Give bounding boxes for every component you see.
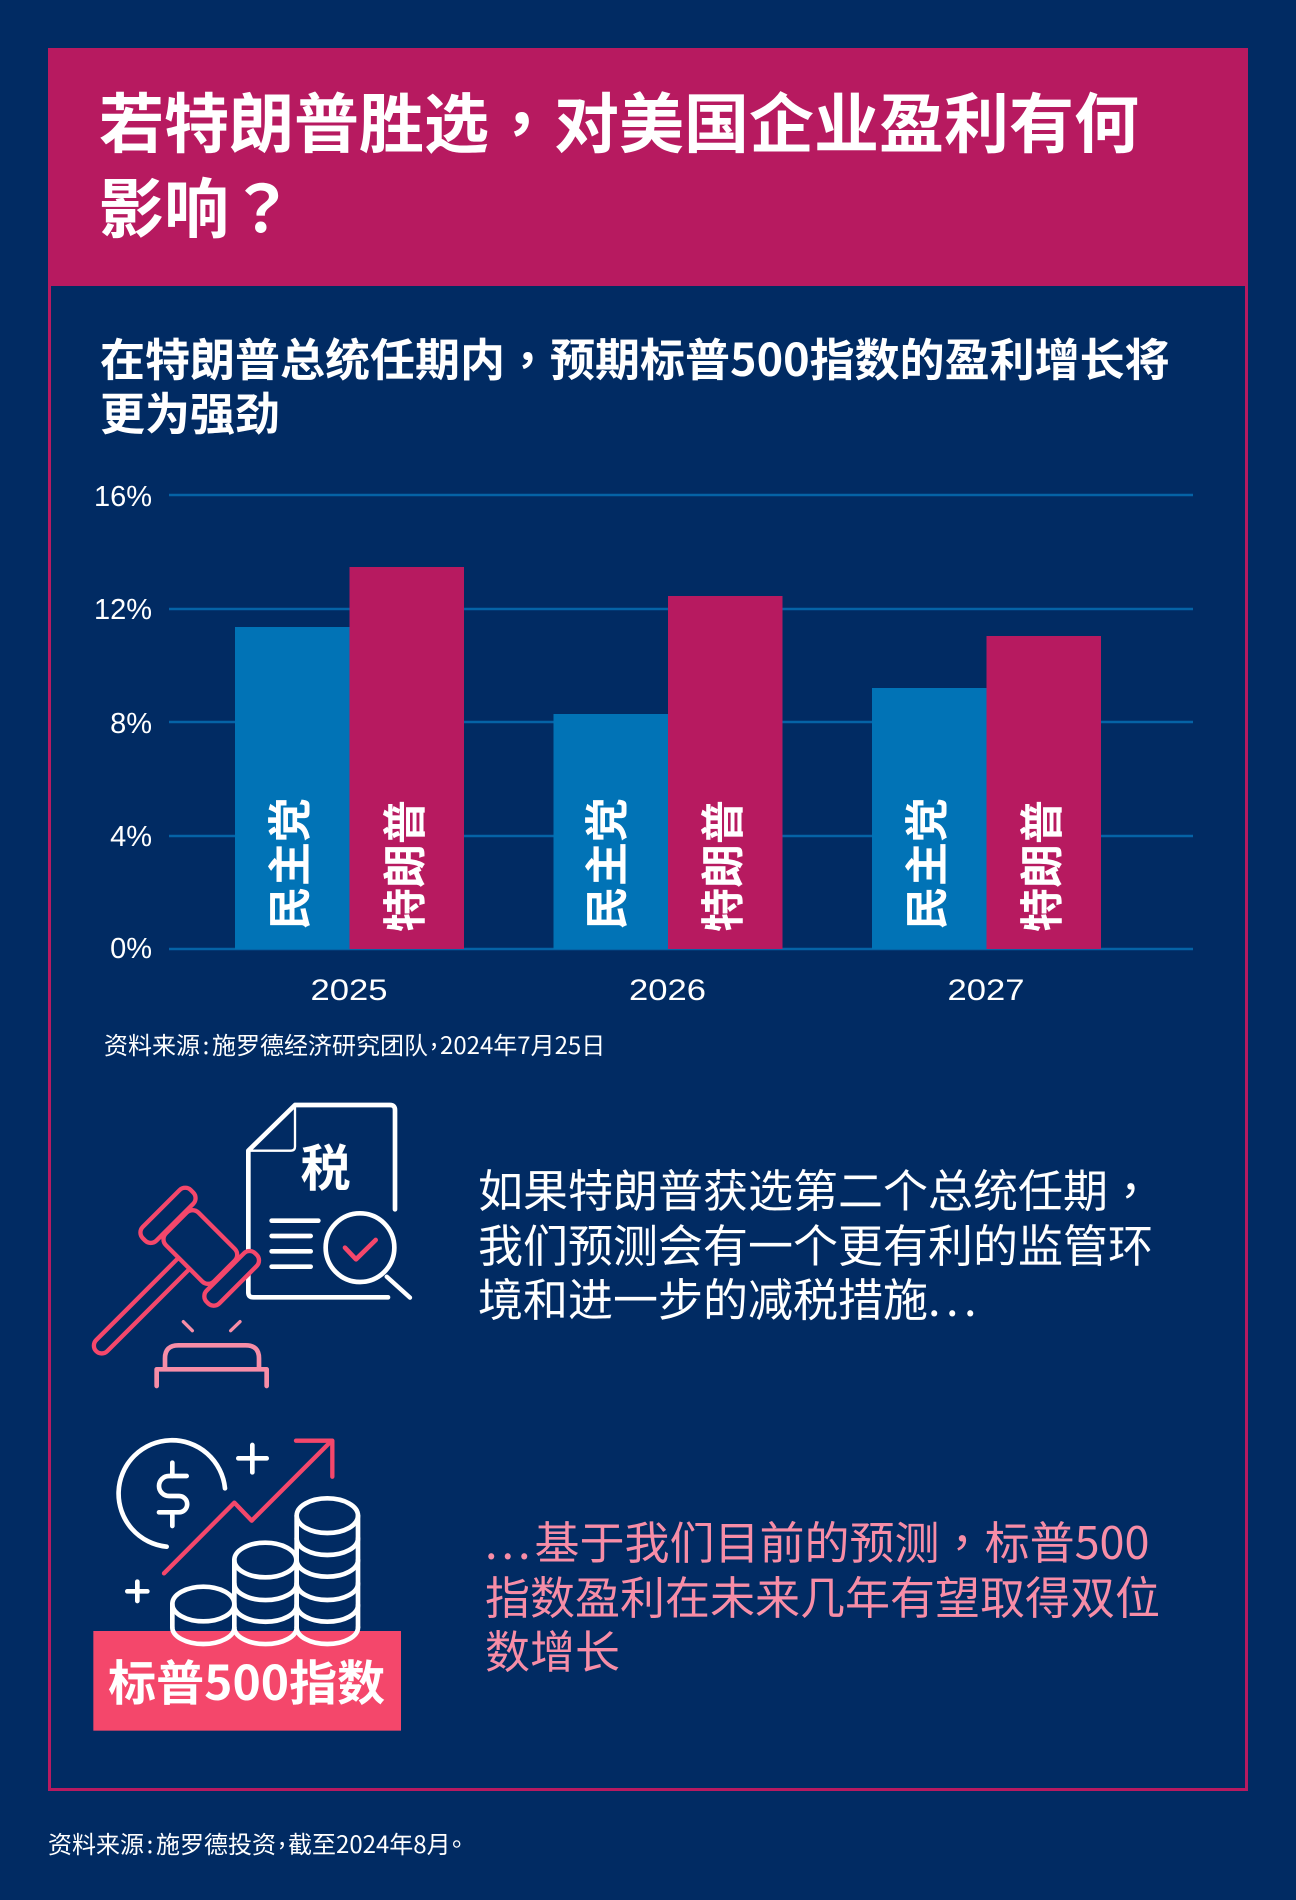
label box: S&amp;P 500 index — [93, 1631, 401, 1731]
icon: gavel and tax document — [92, 1102, 412, 1388]
text block: earnings growth forecast: ...基于我们目前的预测，标普500 — [485, 1507, 1150, 1572]
text block: regulation and tax cuts — [478, 1155, 1153, 1329]
x axis labels: 2025 — [310, 974, 388, 1007]
title: 影响？ — [99, 157, 294, 251]
chart source note: , — [431, 1018, 437, 1053]
bars 2026: 特朗普 — [688, 800, 752, 932]
footer source note: 资料来源 施罗德投资 截至2024年8月。 — [48, 1825, 469, 1860]
bars 2027 — [872, 636, 1101, 949]
y axis labels: 12% — [94, 594, 152, 626]
panel: title banner — [48, 48, 1248, 286]
bars 2026 — [554, 596, 782, 949]
subtitle heading — [100, 324, 1170, 443]
arrow: growth trend — [164, 1441, 332, 1573]
bars 2027: 民主党 — [892, 798, 956, 930]
footer source note: : — [147, 1825, 153, 1860]
label box: S&amp;P 500 index: 标普500指数 — [108, 1644, 385, 1714]
text block: regulation and tax cuts: 如果特朗普获选第二个总统任期， — [478, 1155, 1153, 1220]
footer source note: , — [279, 1817, 285, 1852]
bars 2025: 民主党 — [254, 798, 318, 930]
y axis labels: 16% — [94, 481, 152, 513]
subtitle heading: 更为强劲 — [100, 378, 280, 443]
icon: tax document — [248, 1105, 410, 1298]
chart source note: 资料来源 施罗德经济研究团队 2024年7月25日 — [104, 1026, 605, 1061]
bars 2026: 民主党 — [572, 798, 636, 930]
chart source note: : — [203, 1026, 209, 1061]
icon: S&amp;P 500 coins and growth — [93, 1438, 401, 1731]
x axis labels: 2027 — [948, 974, 1024, 1007]
text block: earnings growth forecast: 指数盈利在未来几年有望取得双位 — [485, 1562, 1160, 1626]
icon: sound block — [157, 1322, 267, 1386]
grid lines and axis — [169, 495, 1193, 949]
text block: regulation and tax cuts: 我们预测会有一个更有利的监管环 — [478, 1210, 1153, 1274]
text block: earnings growth forecast: 数增长 — [485, 1616, 620, 1681]
bars 2025 — [235, 567, 464, 949]
bars 2027: 特朗普 — [1006, 800, 1070, 932]
y axis labels: 4% — [110, 821, 152, 853]
subtitle heading: 在特朗普总统任期内，预期标普500指数的盈利增长将 — [100, 324, 1170, 389]
text block: earnings growth forecast — [485, 1507, 1160, 1681]
title — [99, 72, 1139, 251]
text block: regulation and tax cuts: 境和进一步的减税措施... — [478, 1264, 982, 1329]
x axis labels — [310, 974, 1024, 1007]
x axis labels: 2026 — [629, 974, 706, 1007]
bars 2025: 特朗普 — [370, 800, 434, 932]
y axis labels — [94, 481, 152, 965]
title: 若特朗普胜选，对美国企业盈利有何 — [99, 72, 1139, 166]
y axis labels: 0% — [110, 933, 152, 965]
icon: dollar circle and plus signs — [119, 1440, 267, 1601]
icon: gavel — [91, 1184, 262, 1357]
bar chart — [94, 481, 1193, 1007]
icon: coin stacks — [172, 1498, 358, 1644]
icon: tax document: 税 — [301, 1129, 351, 1201]
y axis labels: 8% — [110, 708, 152, 740]
